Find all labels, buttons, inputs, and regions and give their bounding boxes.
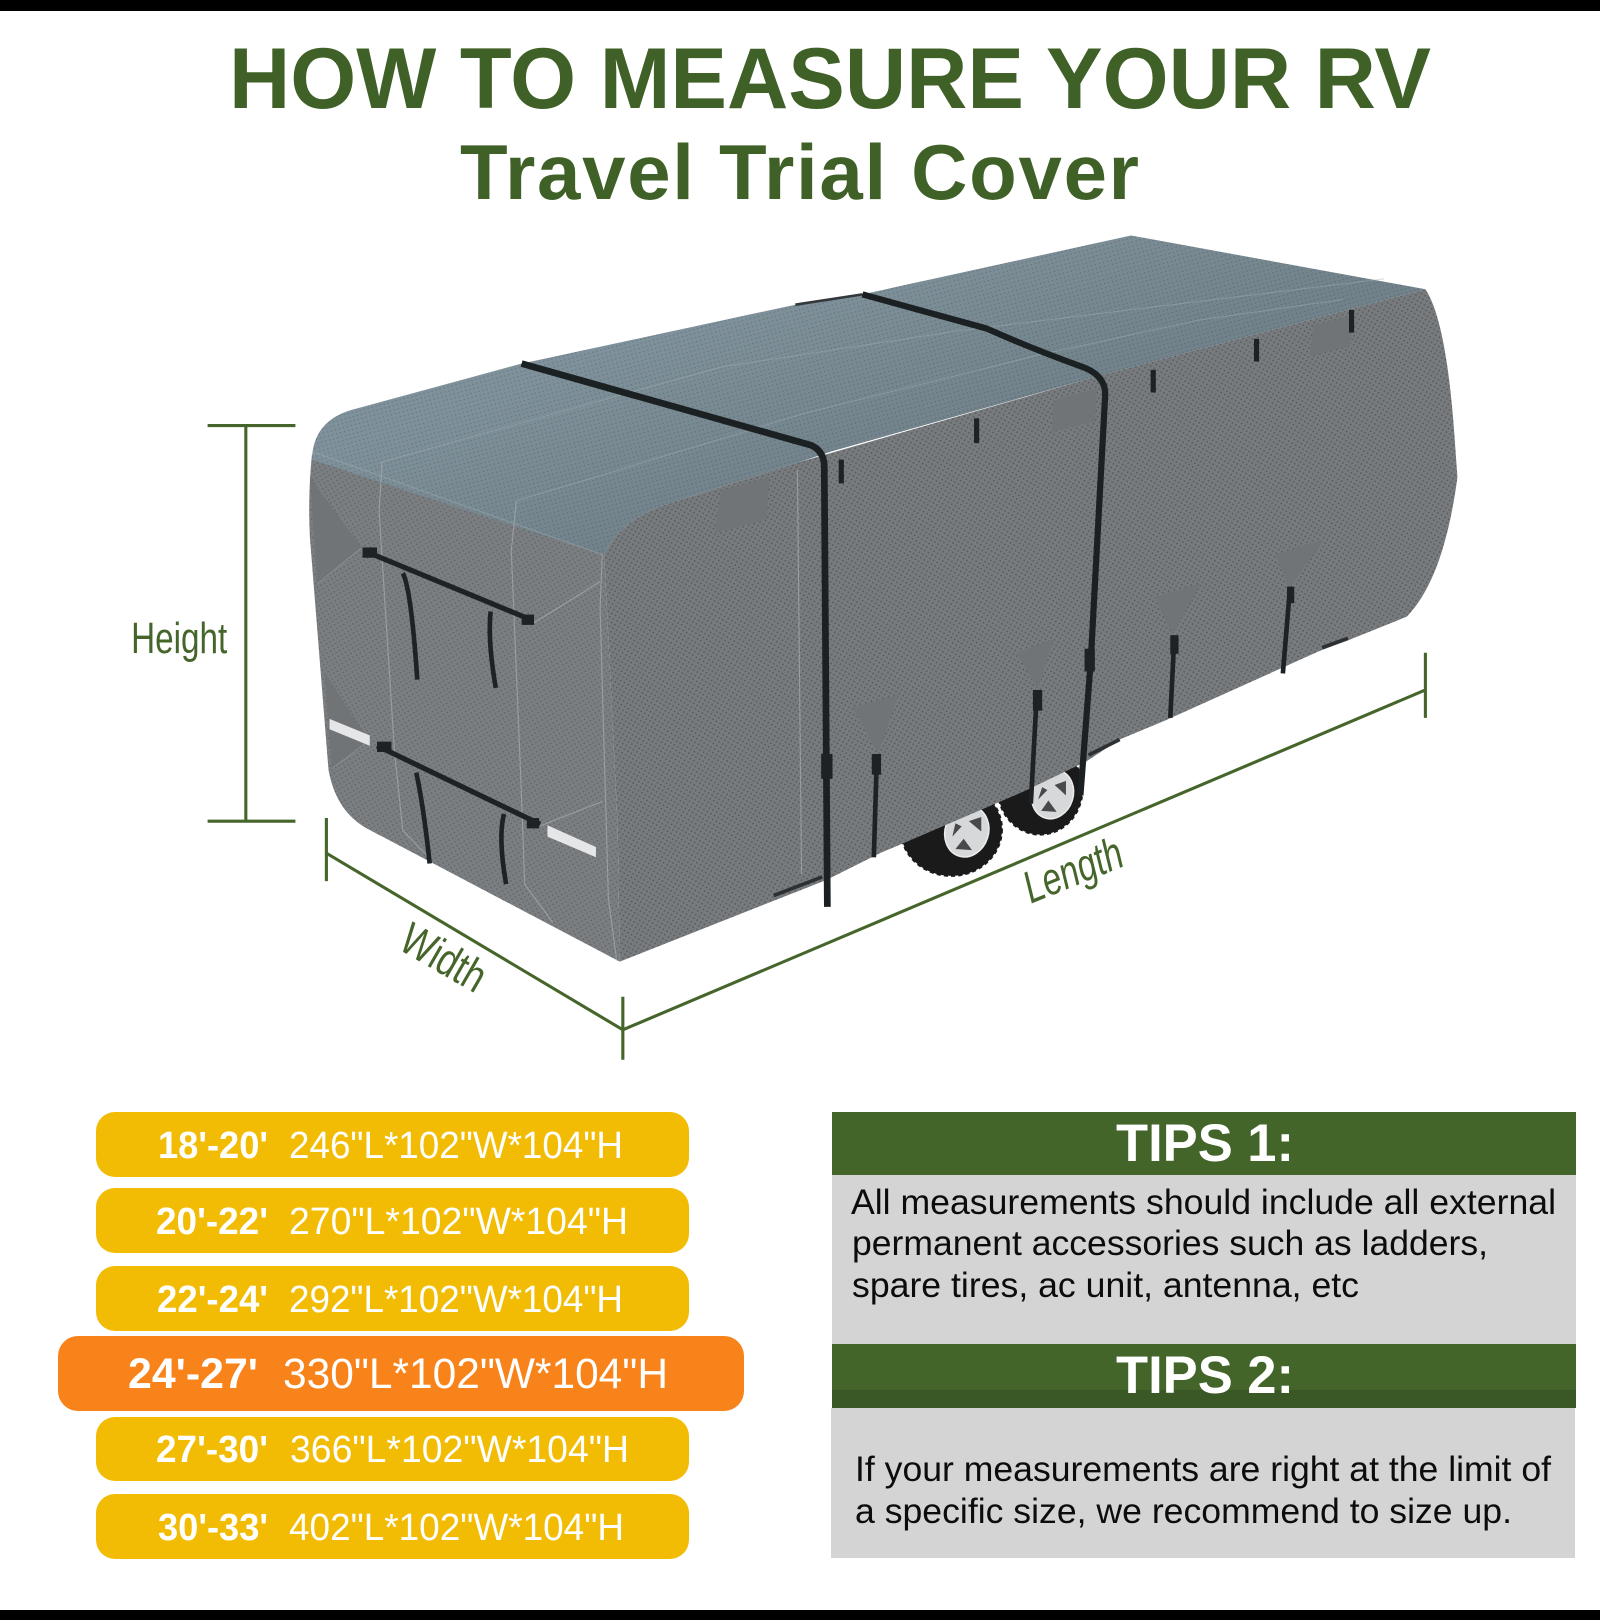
tips 2 header shade bbox=[832, 1390, 1576, 1408]
size row 27-30: 366"L*102"W*104"H bbox=[290, 1429, 629, 1471]
tips 1 text bbox=[851, 1183, 1556, 1305]
roof connector strip bbox=[795, 294, 862, 305]
cover front panel bbox=[309, 454, 620, 962]
size row 24-27 highlighted: 330"L*102"W*104"H bbox=[283, 1350, 668, 1398]
size row 30-33: 30'-33' bbox=[158, 1507, 268, 1549]
size row 20-22: 270"L*102"W*104"H bbox=[289, 1201, 628, 1243]
reflector strips bbox=[329, 719, 596, 857]
RV with cover illustration bbox=[131, 236, 1457, 1060]
tips 1 text: spare tires, ac unit, antenna, etc bbox=[852, 1266, 1359, 1305]
size row 20-22 bbox=[96, 1188, 689, 1253]
cover flaps bbox=[310, 315, 1353, 768]
icon: front wheel bbox=[998, 744, 1082, 835]
tips 1 heading: TIPS 1: bbox=[1116, 1114, 1294, 1173]
top panel shading bbox=[312, 236, 1425, 555]
size row 30-33: 402"L*102"W*104"H bbox=[289, 1507, 624, 1549]
dimension: height bbox=[131, 426, 295, 821]
subtitle: Travel Trial Cover bbox=[460, 128, 1139, 216]
title: HOW TO MEASURE YOUR RV bbox=[229, 31, 1431, 127]
size row 22-24: 22'-24' bbox=[157, 1279, 268, 1321]
label: length: Length bbox=[1015, 827, 1130, 913]
tips 2 text: a specific size, we recommend to size up. bbox=[855, 1492, 1512, 1531]
main top strap front bbox=[862, 294, 1105, 795]
size row 30-33 bbox=[96, 1494, 689, 1559]
front panel seams bbox=[317, 462, 802, 961]
side tabs and buckles bbox=[363, 310, 1354, 828]
panel: tips 2 bbox=[831, 1344, 1576, 1558]
tips 1 text: permanent accessories such as ladders, bbox=[852, 1224, 1488, 1263]
tips 2 header bar bbox=[832, 1344, 1576, 1408]
bottom black band bbox=[0, 1610, 1600, 1620]
side strap tails bbox=[874, 587, 1290, 857]
tips 2 text bbox=[855, 1450, 1551, 1531]
panel: tips 1 bbox=[832, 1112, 1576, 1344]
top black band bbox=[0, 0, 1600, 11]
top surface stitch lines bbox=[314, 279, 1384, 555]
size row 27-30: 27'-30' bbox=[156, 1429, 268, 1471]
tips 2 heading: TIPS 2: bbox=[1116, 1346, 1294, 1405]
label: width: Width bbox=[392, 913, 496, 1002]
size row 22-24 bbox=[96, 1266, 689, 1331]
size row 18-20: 18'-20' bbox=[158, 1125, 268, 1167]
lower cover edge trims bbox=[774, 638, 1348, 896]
size row 24-27 highlighted: 24'-27' bbox=[128, 1350, 258, 1398]
size row 18-20: 246"L*102"W*104"H bbox=[289, 1125, 623, 1167]
main top strap rear bbox=[522, 364, 827, 907]
label: height: Height bbox=[131, 615, 227, 663]
size row 18-20 bbox=[96, 1112, 689, 1177]
tips 1 text: All measurements should include all external bbox=[851, 1183, 1556, 1222]
cover top panel bbox=[312, 236, 1425, 555]
size row 24-27 highlighted bbox=[58, 1336, 744, 1411]
dimension: length bbox=[623, 653, 1425, 1030]
dimension: width bbox=[326, 818, 623, 1060]
size row 22-24: 292"L*102"W*104"H bbox=[289, 1279, 623, 1321]
tips 1 body bbox=[832, 1175, 1576, 1344]
icon: rear wheel bbox=[901, 783, 1002, 876]
size row 27-30 bbox=[96, 1417, 689, 1481]
size row 20-22: 20'-22' bbox=[156, 1201, 268, 1243]
tips 2 body bbox=[831, 1408, 1575, 1558]
front straps bbox=[364, 551, 540, 884]
cover side panel bbox=[604, 289, 1457, 962]
tips 1 header bar bbox=[832, 1112, 1576, 1175]
tips 2 text: If your measurements are right at the limit of bbox=[855, 1450, 1551, 1489]
panel: size list bbox=[58, 1112, 744, 1559]
